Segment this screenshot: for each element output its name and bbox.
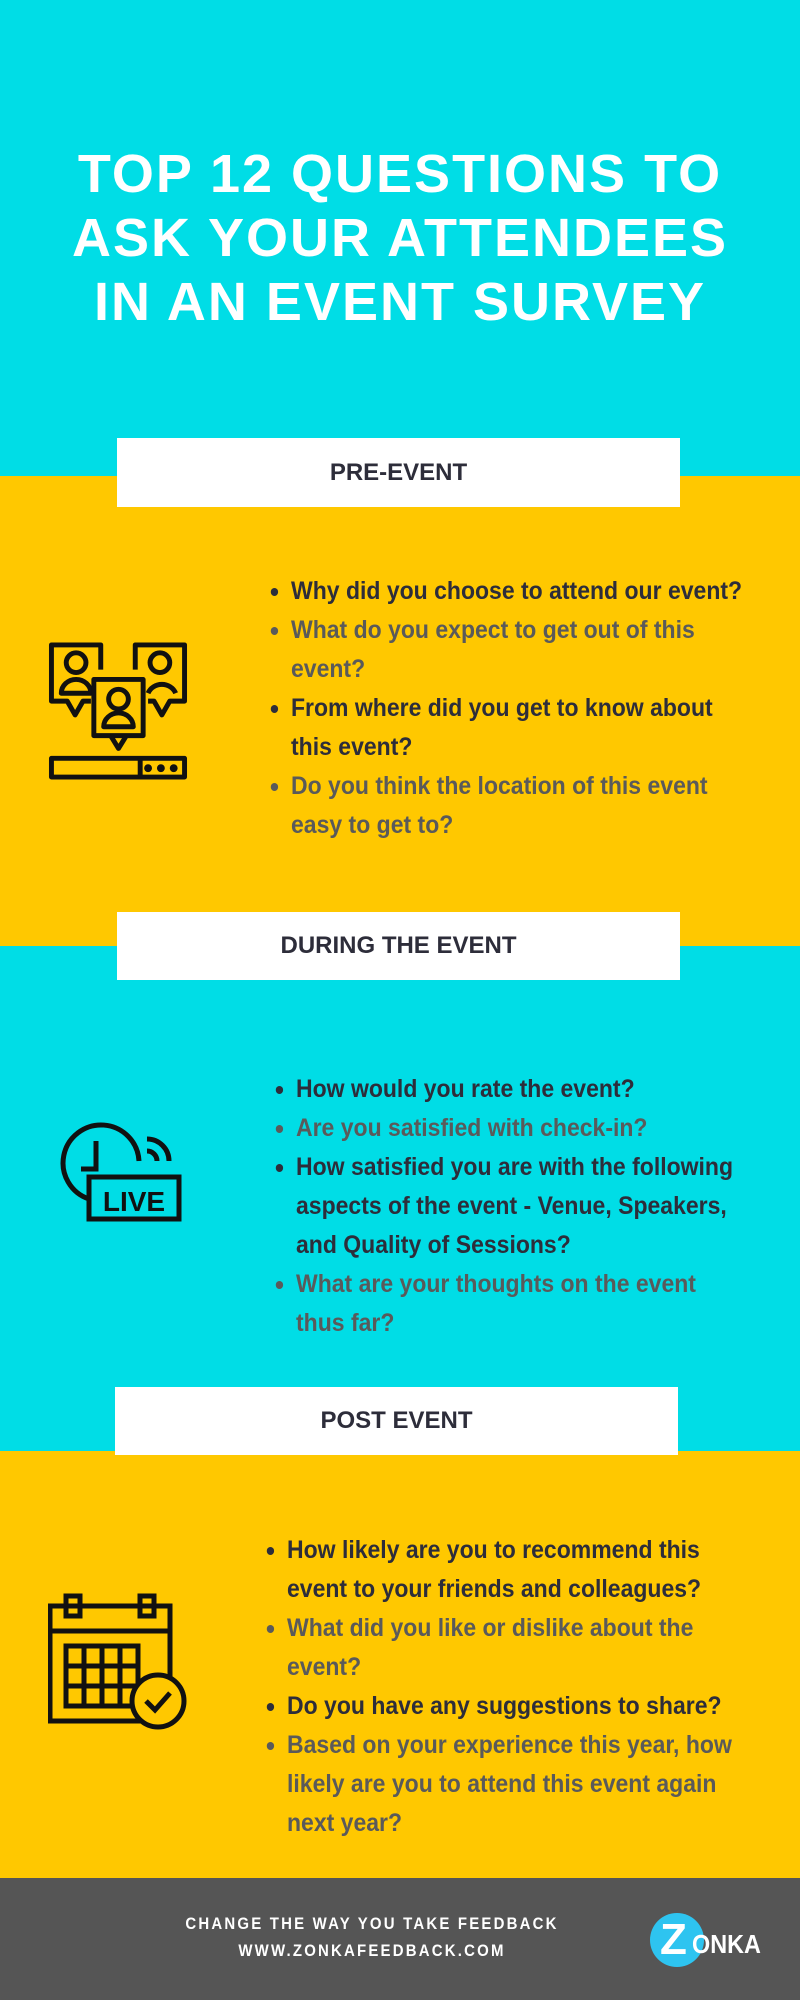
list: during questions: aspects of the event - Venue, Speakers, [296, 1192, 727, 1220]
list: pre-event questions: Why did you choose to attend our event? [291, 577, 742, 605]
title: TOP 12 QUESTIONS TO [78, 144, 722, 204]
list: during questions: What are your thoughts on the event [296, 1270, 696, 1298]
list: pre-event questions [270, 577, 742, 839]
icon: live clock [60, 1122, 182, 1222]
icon: live clock: LIVE [103, 1186, 165, 1217]
footer text [185, 1914, 559, 1960]
list: pre-event questions: What do you expect to get out of this [291, 616, 695, 644]
list: during questions: How would you rate the event? [296, 1075, 635, 1103]
list: pre-event questions: easy to get to? [291, 811, 453, 839]
list: post questions: Based on your experience this year, how [287, 1731, 732, 1759]
list: post questions: What did you like or dislike about the [287, 1614, 693, 1642]
title [72, 144, 728, 332]
panel: pre-event [0, 476, 800, 946]
heading: during [117, 912, 680, 980]
heading: post [115, 1387, 678, 1455]
list: post questions: event to your friends and colleagues? [287, 1575, 701, 1603]
list: during questions: Are you satisfied with check-in? [296, 1114, 647, 1142]
footer text: CHANGE THE WAY YOU TAKE FEEDBACK [185, 1914, 559, 1933]
footer text: WWW.ZONKAFEEDBACK.COM [238, 1941, 506, 1960]
list: post questions: event? [287, 1653, 361, 1681]
heading: pre-event [117, 438, 680, 507]
list: pre-event questions: this event? [291, 733, 412, 761]
list: post questions [266, 1536, 732, 1837]
panel: post [0, 1451, 800, 1878]
list: pre-event questions: From where did you get to know about [291, 694, 713, 722]
panel: during [0, 946, 800, 1451]
list: post questions: Do you have any suggestions to share? [287, 1692, 722, 1720]
icon: calendar [48, 1594, 186, 1730]
logo: zonka: ONKA [692, 1929, 761, 1959]
list: during questions: and Quality of Sessions? [296, 1231, 571, 1259]
list: post questions: next year? [287, 1809, 402, 1837]
title: IN AN EVENT SURVEY [94, 272, 706, 332]
heading: post: POST EVENT [320, 1407, 473, 1434]
list: during questions: thus far? [296, 1309, 394, 1337]
list: during questions: How satisfied you are with the following [296, 1153, 733, 1181]
footer [0, 1878, 800, 2000]
logo: zonka [650, 1913, 761, 1967]
heading: during: DURING THE EVENT [280, 932, 516, 959]
list: post questions: likely are you to attend this event again [287, 1770, 716, 1798]
title: ASK YOUR ATTENDEES [72, 208, 728, 268]
list: pre-event questions: event? [291, 655, 365, 683]
list: pre-event questions: Do you think the location of this event [291, 772, 708, 800]
heading: pre-event: PRE-EVENT [330, 459, 467, 486]
list: post questions: How likely are you to recommend this [287, 1536, 700, 1564]
icon: people chat [49, 642, 187, 780]
list: during questions [276, 1075, 733, 1337]
logo: zonka: Z [660, 1915, 687, 1964]
